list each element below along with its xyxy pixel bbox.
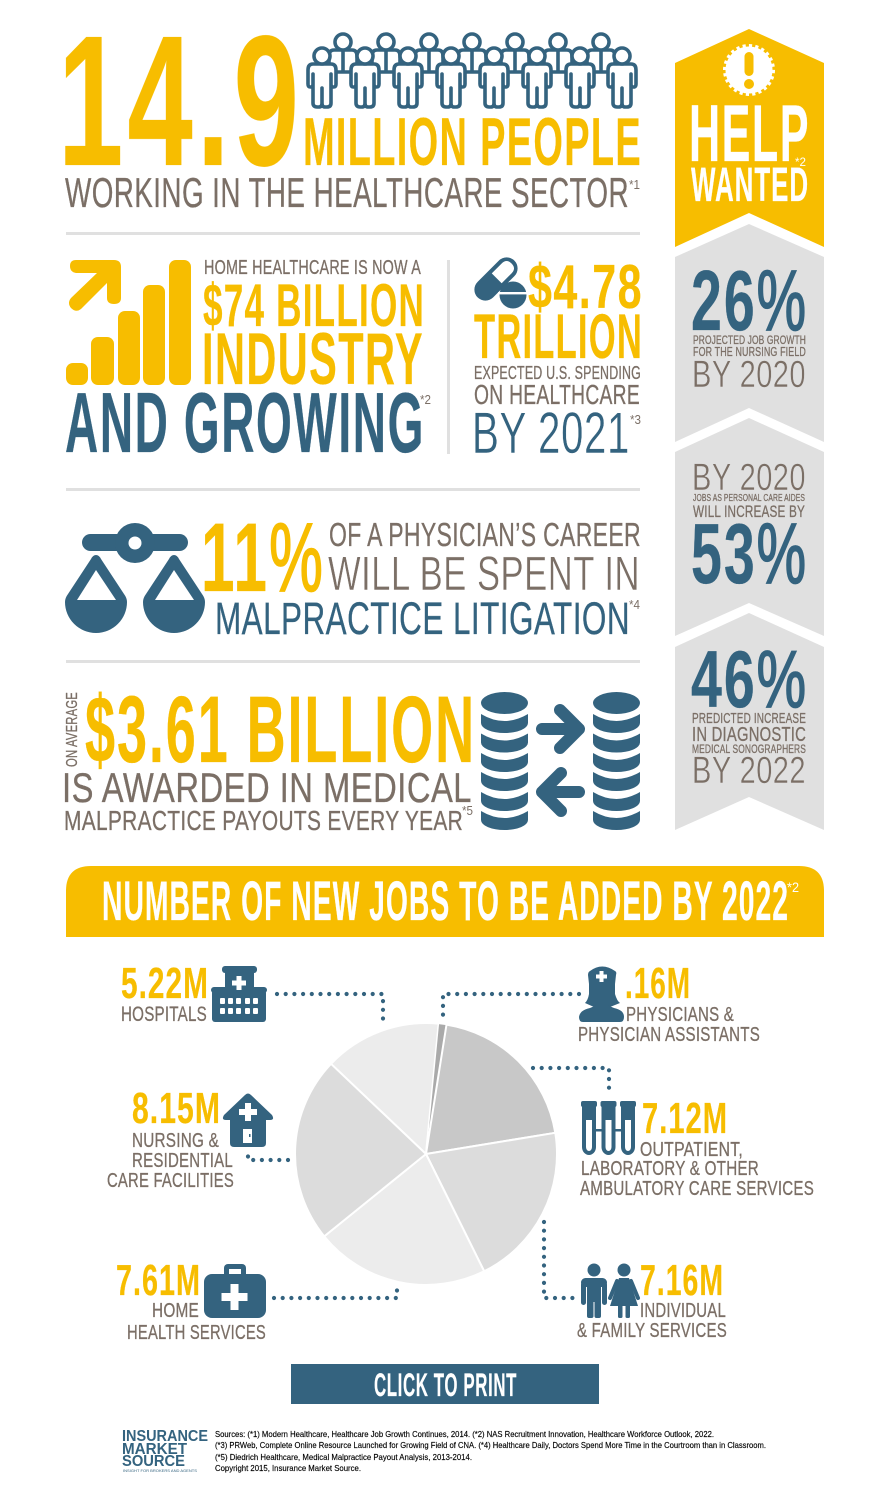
button label: CLICK TO PRINT xyxy=(374,1367,517,1403)
footnote marker 1: *1 xyxy=(629,177,640,192)
footnote marker 4: *4 xyxy=(629,597,640,612)
text: in diagnostic: IN DIAGNOSTIC xyxy=(692,724,806,746)
label line 2: PHYSICIAN ASSISTANTS xyxy=(578,1024,760,1046)
leader: physicians xyxy=(443,994,579,1018)
logo: insurance market source: SOURCE xyxy=(122,1453,185,1470)
heading: industry: INDUSTRY xyxy=(202,319,424,400)
text: medical sonographers: MEDICAL SONOGRAPHERS xyxy=(692,742,806,756)
text: home healthcare is now a: HOME HEALTHCARE IS NOW A xyxy=(204,257,421,279)
icon: medical kit xyxy=(204,1264,266,1318)
panel: 14.9 million people xyxy=(58,0,642,216)
leader: hospitals xyxy=(277,994,383,1025)
text: will be spent in: WILL BE SPENT IN xyxy=(328,548,640,601)
text: malpractice litigation: MALPRACTICE LITIGATION xyxy=(215,593,630,644)
button: click to print xyxy=(291,1364,599,1404)
item: hospitals xyxy=(121,959,267,1026)
value: 7.16M xyxy=(640,1256,724,1305)
icon: man and woman xyxy=(581,1264,638,1318)
icon: nurse xyxy=(579,966,624,1022)
label line 1: OUTPATIENT, xyxy=(640,1139,743,1161)
ribbon shape xyxy=(675,418,824,636)
label line 1: PHYSICIANS & xyxy=(626,1004,734,1026)
leader: outpatient xyxy=(533,1068,609,1094)
sources text: Copyright 2015, Insurance Market Source. xyxy=(215,1463,361,1473)
text: jobs as personal care aides: JOBS AS PERSONAL CARE AIDES xyxy=(693,493,805,504)
button shape xyxy=(291,1364,599,1404)
panel: diagnostic sonographers xyxy=(675,613,824,830)
value: 7.12M xyxy=(642,1094,728,1143)
text: by 2020: BY 2020 xyxy=(692,457,806,499)
ribbon shape xyxy=(675,613,824,830)
text: on healthcare: ON HEALTHCARE xyxy=(474,379,640,410)
text: for the nursing field: FOR THE NURSING FIELD xyxy=(693,344,806,359)
label line 2: LABORATORY & OTHER xyxy=(581,1158,759,1180)
stat: 26%: 26% xyxy=(691,254,808,349)
leader: home health xyxy=(274,1290,397,1298)
footnote marker 2: *2 xyxy=(795,155,806,169)
icon: house with cross xyxy=(223,1094,273,1147)
sources text xyxy=(215,1429,766,1473)
big number 14.9: 14.9 xyxy=(58,0,303,205)
panel: healthcare spending xyxy=(470,253,643,466)
heading: trillion: TRILLION xyxy=(474,302,643,372)
stat: $4.78: $4.78 xyxy=(528,253,643,322)
value: 7.61M xyxy=(116,1256,201,1305)
label line 2: & FAMILY SERVICES xyxy=(577,1320,727,1342)
panel: malpractice payouts xyxy=(62,677,640,836)
text: is awarded in medical: IS AWARDED IN MEDICAL xyxy=(62,764,472,811)
panel: nursing job growth xyxy=(675,224,824,442)
footnote marker 2: *2 xyxy=(420,392,431,407)
value: .16M xyxy=(625,959,691,1008)
item: physicians xyxy=(578,959,760,1046)
stat: 46%: 46% xyxy=(691,635,808,725)
value: 8.15M xyxy=(132,1084,221,1133)
logo: insurance market source: INSIGHT FOR BROKERS AND AGENTS xyxy=(123,1468,197,1473)
leader: nursing xyxy=(248,1152,288,1160)
banner: new jobs heading xyxy=(66,866,824,937)
icon: exclamation badge xyxy=(724,46,774,94)
sources text: (*5) Diedrich Healthcare, Medical Malpractice Payout Analysis, 2013-2014. xyxy=(215,1452,472,1462)
logo: insurance market source: MARKET xyxy=(122,1441,187,1458)
leader: individual and family xyxy=(544,1222,576,1298)
ribbon shape xyxy=(675,29,824,247)
text: projected job growth: PROJECTED JOB GROWTH xyxy=(693,333,806,347)
label line 2: RESIDENTIAL xyxy=(132,1150,233,1172)
icon: row of people xyxy=(308,34,636,107)
text: malpractice payouts every year: MALPRACTICE PAYOUTS EVERY YEAR xyxy=(64,805,463,836)
label line 3: CARE FACILITIES xyxy=(107,1170,234,1192)
item: home health xyxy=(116,1256,266,1344)
text: by 2022: BY 2022 xyxy=(692,750,806,792)
text: on average rotated: ON AVERAGE xyxy=(64,692,81,767)
icon: scales xyxy=(65,523,205,633)
icon: coin stacks xyxy=(481,692,640,830)
label line 2: HEALTH SERVICES xyxy=(127,1322,266,1344)
pie chart: new jobs by sector xyxy=(295,1023,557,1285)
text: will increase by: WILL INCREASE BY xyxy=(693,502,805,521)
label line 1: INDIVIDUAL xyxy=(640,1300,726,1322)
panel: help wanted ribbon xyxy=(675,29,824,247)
text: predicted increase: PREDICTED INCREASE xyxy=(692,710,806,727)
label line 3: AMBULATORY CARE SERVICES xyxy=(580,1178,814,1200)
text: expected u.s. spending: EXPECTED U.S. SPENDING xyxy=(474,363,641,383)
stat: 11%: 11% xyxy=(201,503,325,612)
label: HOSPITALS xyxy=(121,1003,207,1026)
text: by 2021: BY 2021 xyxy=(472,401,630,466)
arrow: left xyxy=(542,773,579,811)
footnote marker 5: *5 xyxy=(462,803,473,818)
icon: pills xyxy=(470,253,528,308)
text: by 2020: BY 2020 xyxy=(692,354,806,396)
sources text: (*3) PRWeb, Complete Online Resource Launched for Growing Field of CNA. (*4) Healthcare Daily, Doctors Spend More Time in the Courtroom than in Classroom. xyxy=(215,1440,766,1450)
banner shape xyxy=(66,866,824,937)
item: nursing and residential xyxy=(107,1084,273,1192)
stat: 53%: 53% xyxy=(691,507,808,602)
logo: insurance market source xyxy=(122,1428,208,1473)
stat: $74 billion: $74 BILLION xyxy=(203,272,425,339)
panel: home healthcare industry xyxy=(65,257,431,471)
icon: hospital xyxy=(211,966,267,1022)
footnote marker 3: *3 xyxy=(630,412,641,427)
sources text: Sources: (*1) Modern Healthcare, Healthcare Job Growth Continues, 2014. (*2) NAS Recruitment Innovation, Healthcare Workforce Outlook, 2022. xyxy=(215,1429,714,1439)
icon: growth bar chart with arrow xyxy=(66,260,191,385)
icon: test tubes xyxy=(581,1101,636,1155)
logo: insurance market source: INSURANCE xyxy=(122,1428,208,1445)
item: individual and family xyxy=(577,1256,727,1342)
heading: and growing: AND GROWING xyxy=(65,376,425,471)
label line 1: NURSING & xyxy=(132,1130,219,1152)
text: of a physician's career: OF A PHYSICIAN’S CAREER xyxy=(329,516,641,553)
arrow: right xyxy=(542,710,579,748)
item: outpatient xyxy=(580,1094,814,1200)
ribbon shape xyxy=(675,224,824,442)
footnote marker 2: *2 xyxy=(787,879,799,895)
panel: malpractice litigation xyxy=(65,503,641,644)
label line 1: HOME xyxy=(152,1300,199,1322)
panel: personal care aides xyxy=(675,418,824,636)
value: 5.22M xyxy=(121,959,209,1008)
stat: $3.61 billion: $3.61 BILLION xyxy=(85,677,476,783)
